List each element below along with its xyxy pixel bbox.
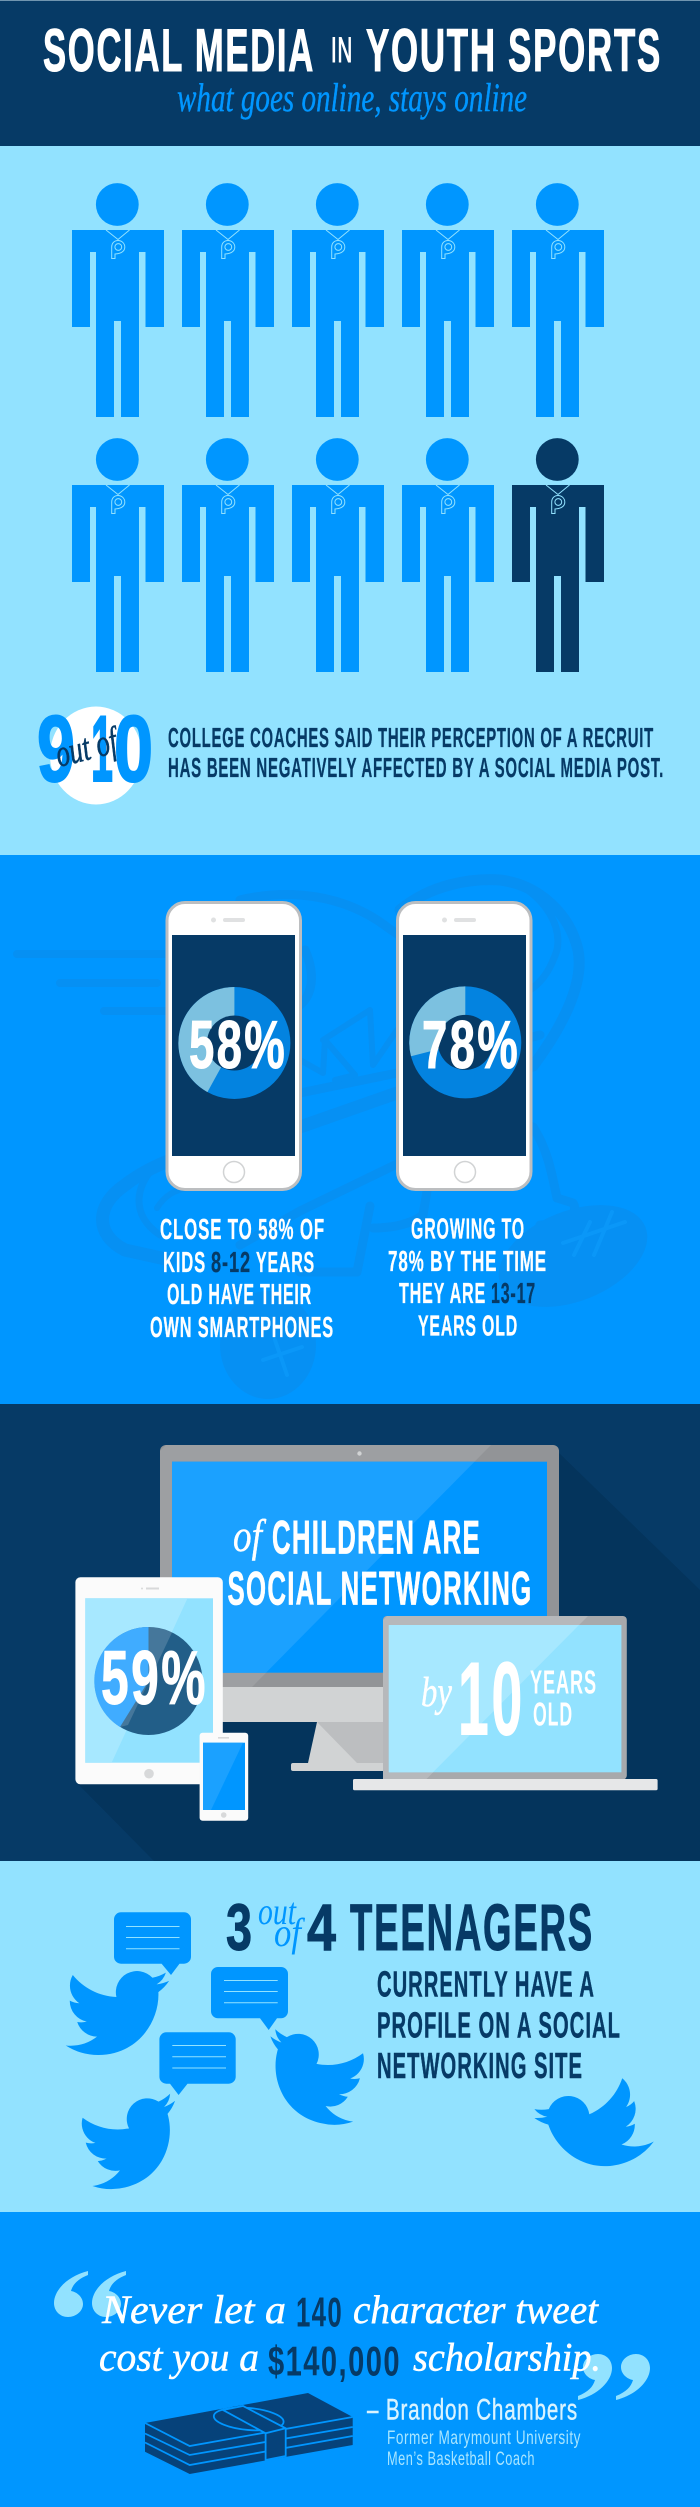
text: by 10 years old: OLD [533,1695,573,1732]
quote text: cost you a [99,2335,259,2380]
text: profile on a social networking site [377,1964,621,2086]
heading: 3 out of 4 teenagers: out [258,1891,297,1933]
phone: 78% [398,902,531,1190]
quote text: 140 [296,2288,343,2336]
caption: 8-12 years [150,1214,334,1344]
caption: 8-12 years: KIDS [163,1247,206,1279]
phone: 58% [167,902,300,1190]
title: SOCIAL MEDIA [43,17,315,84]
desktop monitor [160,1445,559,1771]
icon: opening quote marks [54,2271,126,2317]
stat: 59%: 59% [101,1636,208,1721]
icon: speech bubble 1 [114,1912,191,1975]
quote text: $140,000 [268,2338,401,2385]
heading: 3 out of 4 teenagers: of [274,1910,305,1955]
donut chart: 78% [409,986,521,1098]
heading: 3 out of 4 teenagers [226,1890,594,1964]
heading: 3 out of 4 teenagers: 4 [307,1890,336,1964]
caption: 8-12 years: YEARS [256,1247,315,1279]
text: of children are social networking: CHILDREN ARE [272,1511,481,1564]
caption: 13-17 years: GROWING TO [411,1214,525,1246]
text: by 10 years old: by [421,1670,452,1716]
title: IN [331,31,353,70]
panel: quote [0,2212,700,2507]
quote text: Never let a [101,2287,286,2332]
badge: 9 out of 10: 9 [37,696,75,801]
long shadow [78,1453,700,1861]
panel: teenagers [0,1861,700,2212]
icon: speech bubble 3 [159,2032,236,2095]
attribution: – Brandon Chambers [367,2393,578,2426]
laptop [353,1616,658,1790]
icon: closing quote marks [578,2354,650,2400]
pictogram: ten coaches [72,183,604,672]
small phone [200,1733,248,1821]
pie chart: 59% [94,1627,202,1735]
panel: header [0,0,700,146]
attribution: Former Marymount University [387,2428,581,2449]
text: of children are social networking: of [233,1510,267,1561]
badge: 9 out of 10: out of [51,719,124,776]
caption: 13-17 years: 78% BY THE TIME [388,1246,547,1278]
badge: 9 out of 10: 0 [114,696,153,801]
caption: 8-12 years: OWN SMARTPHONES [150,1312,334,1344]
heading: 3 out of 4 teenagers: 3 [226,1890,252,1964]
panel: smartphones [0,855,700,1404]
donut chart: 58% [178,987,290,1099]
icon: speech bubble 2 [211,1967,288,2030]
text: by 10 years old: YEARS [530,1663,597,1700]
stat: 58%: 58% [189,1007,287,1083]
caption: 13-17 years [388,1214,547,1342]
icon: stack of money [145,2393,353,2474]
caption: 8-12 years: CLOSE TO 58% OF [160,1214,325,1246]
text: coaches perception [168,722,664,783]
stat: 78%: 78% [422,1007,520,1083]
icon: twitter birds [66,1971,657,2195]
badge: 9 out of 10 [37,696,153,804]
panel: devices [0,1404,700,1861]
caption: 8-12 years: OLD HAVE THEIR [167,1279,312,1311]
quote text [99,2287,601,2385]
caption: 13-17 years: THEY ARE [399,1278,486,1310]
quote text: character tweet [353,2287,599,2332]
caption: 8-12 years: 8-12 [211,1247,251,1279]
watermark sketch [17,880,579,1272]
caption: 13-17 years: YEARS OLD [418,1310,518,1342]
caption: 13-17 years: 13-17 [491,1278,536,1310]
tablet [75,1577,223,1784]
badge: 9 out of 10: 1 [91,696,113,801]
attribution: Men’s Basketball Coach [387,2449,535,2470]
text: by 10 years old: 10 [458,1642,525,1758]
attribution [367,2393,581,2470]
subtitle: what goes online, stays online [177,75,527,120]
text: of children are social networking [228,1510,532,1616]
panel: coaches statistic [0,146,700,855]
quote text: scholarship. [413,2335,601,2380]
